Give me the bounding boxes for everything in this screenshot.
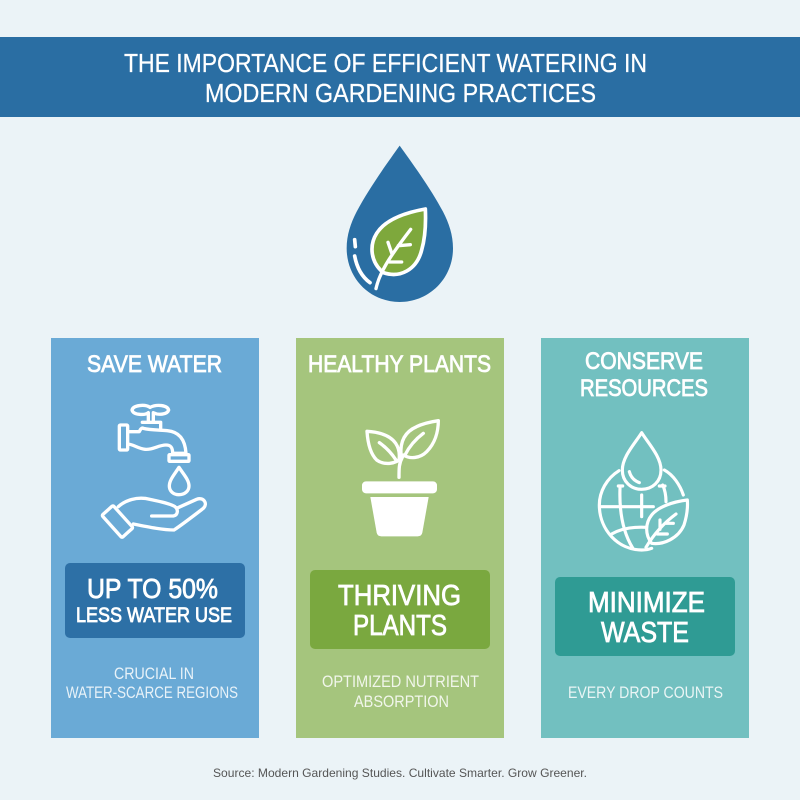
icon: faucet and hand [102,405,205,538]
panel: save water [51,338,259,738]
header banner [0,37,800,117]
title: THE IMPORTANCE OF EFFICIENT WATERING IN [124,48,647,78]
caption: optimized nutrient absorption: ABSORPTION [354,692,449,711]
panel: healthy plants [296,338,504,738]
caption: optimized nutrient absorption [322,672,479,711]
icon: potted seedling [362,421,438,536]
icon: water drop with leaf [347,146,453,302]
icon: globe, drop and leaf [599,433,688,550]
title: MODERN GARDENING PRACTICES [205,78,596,108]
caption: water-scarce regions [66,664,238,702]
stat box: up to 50%: UP TO 50% [87,573,218,604]
stat box: minimize waste [555,577,735,656]
stat box: minimize waste: MINIMIZE [588,587,705,619]
source footer: Source: Modern Gardening Studies. Cultivate Smarter. Grow Greener. [213,766,587,780]
caption: water-scarce regions: CRUCIAL IN [114,664,194,683]
stat box: up to 50% [65,563,245,638]
stat box: minimize waste: WASTE [601,617,689,649]
heading: save water: SAVE WATER [87,351,222,378]
heading: healthy plants: HEALTHY PLANTS [308,351,491,378]
caption: every drop counts: EVERY DROP COUNTS [568,683,723,702]
heading: conserve resources [580,348,708,402]
panel: conserve resources [541,338,749,738]
heading: conserve resources: RESOURCES [580,375,708,402]
title [124,48,647,108]
caption: water-scarce regions: WATER-SCARCE REGIONS [66,683,238,702]
stat box: thriving plants: PLANTS [353,610,447,642]
stat box: thriving plants: THRIVING [338,580,461,612]
stat box: up to 50%: LESS WATER USE [76,604,232,627]
stat box: thriving plants [310,570,490,649]
caption: optimized nutrient absorption: OPTIMIZED NUTRIENT [322,672,479,691]
heading: conserve resources: CONSERVE [585,348,703,375]
